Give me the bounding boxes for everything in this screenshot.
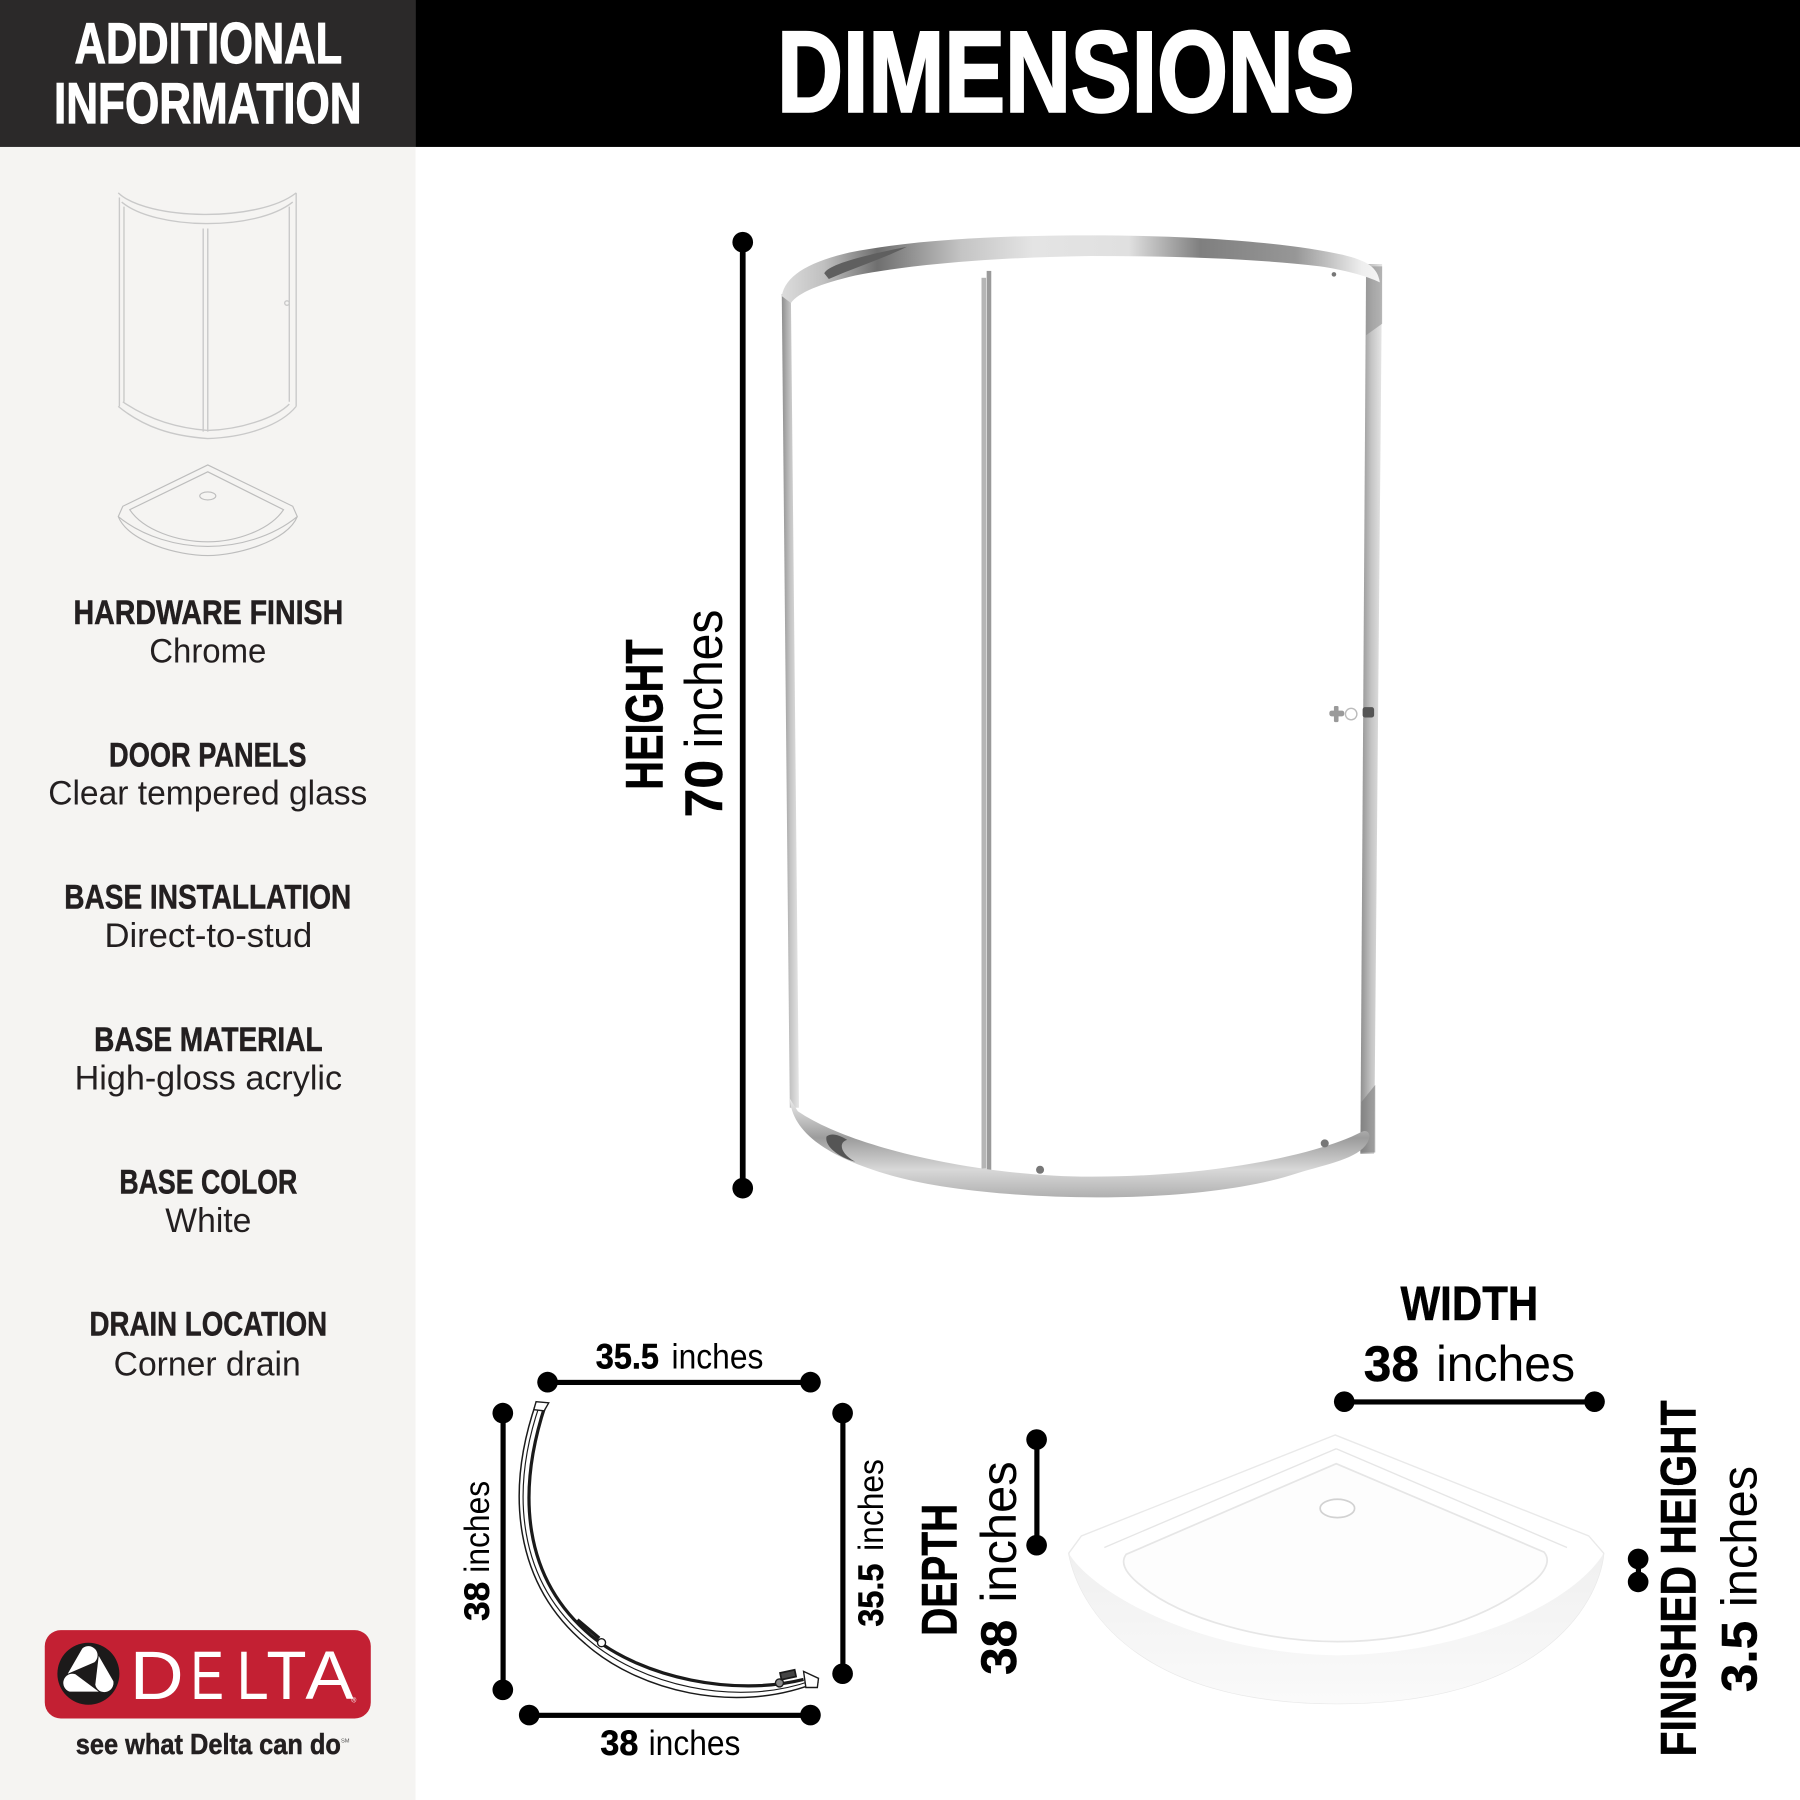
left post [782,294,799,1108]
header: dimensions [416,0,1800,147]
spec: door panels: Clear tempered glass [48,775,367,813]
dimension line: right 35.5 [832,1403,853,1684]
label: bottom 38 inches [600,1723,740,1763]
right post [1360,264,1382,1154]
dimension line: finished height [1628,1549,1648,1592]
spec: base installation: Direct-to-stud [104,917,312,955]
label: top 35.5 inches [596,1336,763,1376]
label: depth 38 inches: DEPTH [910,1504,967,1636]
spec: hardware finish: Chrome [149,632,266,670]
spec: hardware finish: HARDWARE FINISH [73,594,343,632]
label: width 38 inches: WIDTH [1401,1277,1538,1331]
dimension line: bottom 38 [519,1705,821,1725]
logo: delta: D [130,1637,184,1714]
label: width 38 inches: inches [1436,1335,1575,1392]
dimension line: height [732,232,753,1198]
shower door photo [782,235,1382,1197]
spec: base installation: BASE INSTALLATION [64,879,351,917]
spec: base material [75,1021,342,1097]
spec: base material: High-gloss acrylic [75,1059,342,1097]
logo: delta: see what Delta can do [76,1729,341,1761]
header: additional information: INFORMATION [54,72,362,136]
top rail [782,235,1380,303]
header: additional information [0,0,416,147]
logo: delta [45,1630,371,1761]
spec: door panels: DOOR PANELS [109,736,307,774]
base inner basin [1124,1464,1547,1642]
spec: hardware finish [73,594,343,670]
label: right 35.5 inches: inches [851,1459,891,1551]
label: depth 38 inches [910,1461,1027,1675]
shower base photo [1069,1435,1604,1704]
label: left 38 inches: 38 [457,1582,497,1621]
label: height 70 inches: HEIGHT [615,639,674,790]
spec: door panels [48,736,367,813]
label: bottom 38 inches: inches [649,1723,740,1763]
side panel background [0,0,416,1800]
label: top 35.5 inches: 35.5 [596,1336,659,1376]
spec: drain location [90,1306,327,1383]
icon: shower door line drawing [118,193,296,439]
label: right 35.5 inches [851,1459,891,1627]
label: left 38 inches [457,1481,497,1621]
header: additional information: ADDITIONAL [75,12,342,76]
label: width 38 inches: 38 [1364,1335,1419,1392]
base rim shading [1069,1553,1604,1704]
label: right 35.5 inches: 35.5 [851,1564,891,1627]
logo: delta: L [236,1637,269,1714]
drain [1320,1499,1355,1518]
label: height 70 inches: inches [675,610,734,748]
spec: base color: BASE COLOR [119,1163,297,1201]
label: finished height 3.5 inches: inches [1710,1466,1767,1607]
dimension line: depth [1026,1429,1047,1555]
label: depth 38 inches: 38 [970,1620,1027,1675]
spec: base color: White [165,1202,251,1240]
bottom rail [790,1099,1370,1197]
spec: drain location: DRAIN LOCATION [90,1306,327,1344]
label: height 70 inches [615,610,734,817]
label: height 70 inches: 70 [675,760,734,817]
icon: shower base line drawing [118,465,297,556]
label: finished height 3.5 inches [1650,1400,1767,1756]
logo: delta: A [305,1637,354,1714]
label: depth 38 inches: inches [970,1461,1027,1603]
dimension line: top 35.5 [537,1372,821,1392]
spec: base material: BASE MATERIAL [94,1021,323,1059]
label: top 35.5 inches: inches [672,1336,763,1376]
top rail shadow [824,247,907,279]
label: finished height 3.5 inches: FINISHED HEIGHT [1650,1400,1707,1756]
header: dimensions: DIMENSIONS [777,8,1355,136]
label: bottom 38 inches: 38 [600,1723,638,1763]
rollers [1036,272,1336,1174]
plan view drawing [519,1402,818,1697]
dimension line: width [1334,1391,1605,1412]
label: finished height 3.5 inches: 3.5 [1710,1621,1767,1692]
handle [1329,706,1374,722]
logo: delta: ® [351,1696,356,1704]
spec: drain location: Corner drain [114,1345,301,1383]
spec: base installation [64,879,351,955]
bottom rail shadow [826,1135,855,1162]
spec: base color [119,1163,297,1240]
center door edge [982,271,991,1171]
logo: delta: SM [341,1739,350,1745]
logo: delta: T [266,1637,307,1714]
label: left 38 inches: inches [457,1481,497,1573]
label: width 38 inches [1364,1277,1575,1392]
dimension line: left 38 [492,1403,513,1700]
base ledge [1104,1449,1567,1547]
logo: delta: E [191,1637,224,1714]
